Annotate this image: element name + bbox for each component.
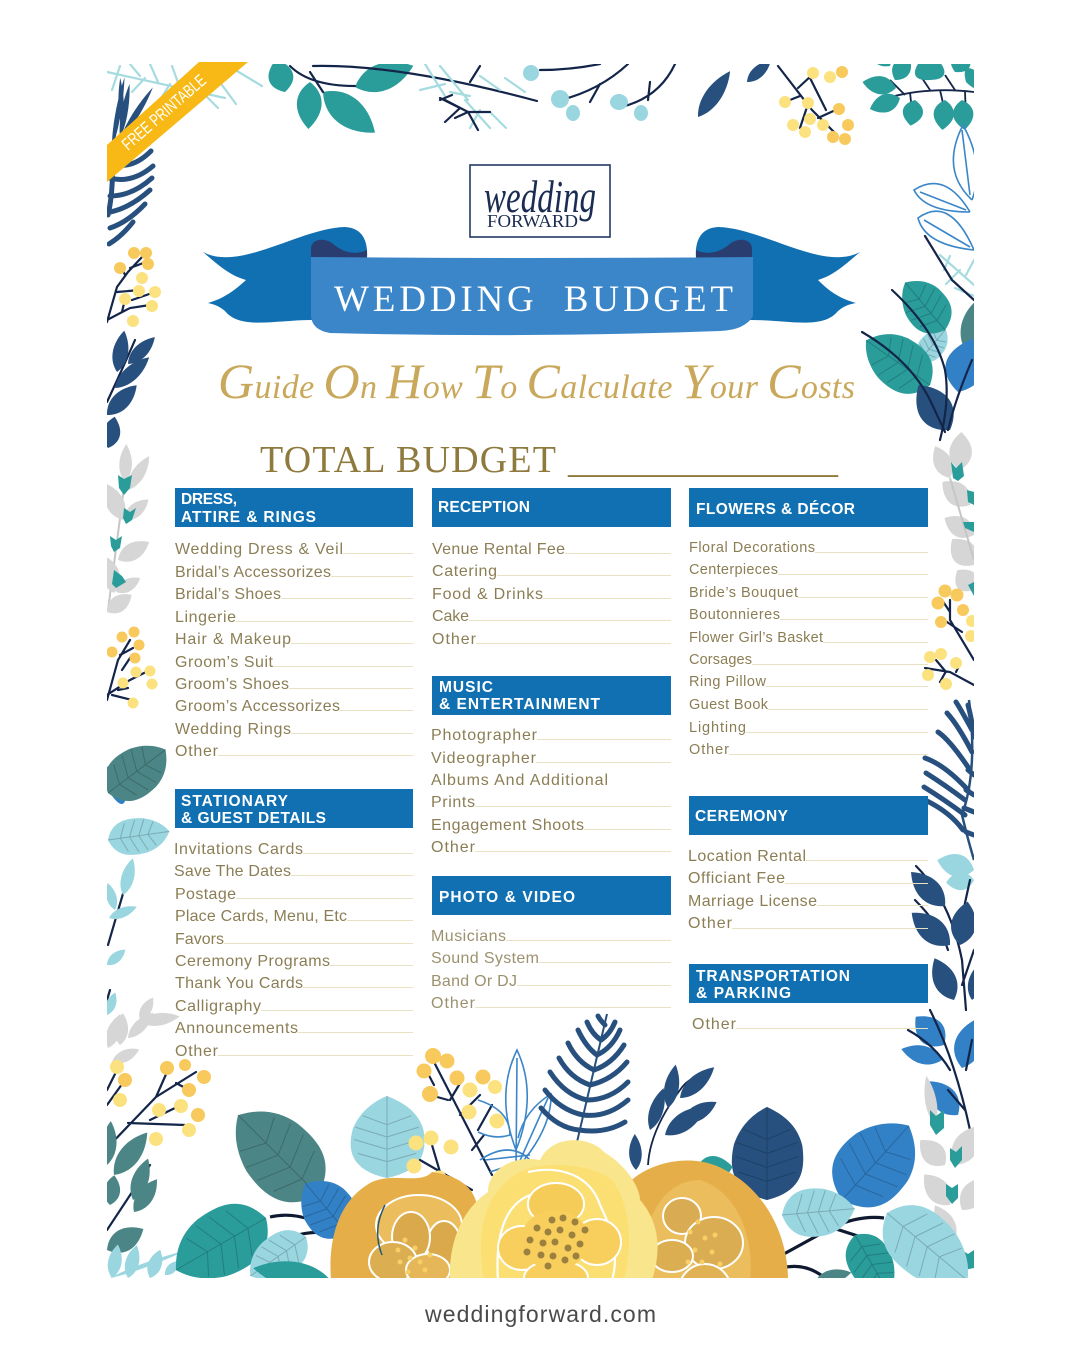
- panel: stationary and guest details: Ceremony Programs: [175, 953, 330, 970]
- panel: music and entertainment: Other: [431, 839, 476, 856]
- bottom left light leaves: [108, 1244, 178, 1278]
- light blue leaf: [351, 1096, 424, 1178]
- panel: ceremony: Other: [688, 915, 733, 932]
- panel: music and entertainment: Photographer: [431, 727, 538, 744]
- panel: ceremony: Location Rental: [688, 848, 806, 865]
- panel: stationary and guest details: STATIONARY: [181, 793, 289, 810]
- panel: transportation and parking: Other: [692, 1016, 737, 1033]
- panel: dress, attire and rings: Wedding Dress & Veil: [175, 541, 343, 558]
- panel: dress, attire and rings: [175, 488, 413, 760]
- bottom right grey sprig: [920, 1076, 974, 1270]
- light blue leaf far right: [866, 1189, 988, 1305]
- panel: transportation and parking: TRANSPORTATION: [696, 968, 850, 985]
- left yellow berries top: [107, 247, 161, 327]
- top left fern: [108, 77, 156, 244]
- panel: stationary and guest details: Other: [175, 1043, 219, 1060]
- panel: stationary and guest details: Favors: [175, 931, 224, 948]
- panel: reception: RECEPTION: [438, 499, 530, 516]
- panel: dress, attire and rings: DRESS,: [181, 491, 237, 508]
- subtitle: Guide On How To Calculate Your Costs: [218, 353, 855, 409]
- right teal and blue leaves: [860, 281, 974, 442]
- panel: music and entertainment: MUSIC: [439, 679, 493, 696]
- right yellow berries: [922, 584, 978, 690]
- centre fern: [541, 1014, 628, 1142]
- panel: stationary and guest details: Invitations Cards: [174, 841, 303, 858]
- panel: photo and video: Other: [431, 995, 476, 1012]
- left yellow berries lower: [106, 626, 158, 708]
- left orange flower: [330, 1172, 478, 1286]
- top teal leaves and branch: [268, 64, 538, 133]
- panel: reception: Other: [432, 631, 477, 648]
- panel: stationary and guest details: Postage: [175, 886, 236, 903]
- panel: dress, attire and rings: ATTIRE & RINGS: [181, 509, 316, 526]
- panel: ceremony: Officiant Fee: [688, 870, 785, 887]
- panel: reception: Food & Drinks: [432, 586, 543, 603]
- logo: [470, 165, 610, 237]
- teal leaf right: [815, 1224, 908, 1305]
- panel: flowers and decor: Centerpieces: [689, 562, 778, 578]
- light blue leaf right: [780, 1185, 857, 1239]
- title ribbon: [203, 227, 860, 335]
- left grey sprig with teal buds: [107, 444, 150, 614]
- top yellow berries: [778, 66, 854, 145]
- panel: dress, attire and rings: Wedding Rings: [175, 721, 291, 738]
- panel: photo and video: Musicians: [431, 928, 506, 945]
- panel: photo and video: PHOTO & VIDEO: [439, 889, 575, 906]
- wedding budget infographic page: [107, 62, 974, 1327]
- panel: music and entertainment: [431, 676, 671, 856]
- left light blue leaves: [107, 858, 137, 1015]
- right grey sprig with teal buds: [933, 432, 974, 596]
- blue leaf: [815, 1102, 936, 1225]
- panel: dress, attire and rings: Lingerie: [175, 609, 236, 626]
- panel: music and entertainment: Albums And Additional: [431, 772, 608, 789]
- panel: photo and video: Band Or DJ: [431, 973, 517, 990]
- panel: flowers and decor: FLOWERS & DÉCOR: [696, 501, 855, 518]
- panel: stationary and guest details: Save The Dates: [174, 863, 291, 880]
- panel: dress, attire and rings: Hair & Makeup: [175, 631, 291, 648]
- footer website: weddingforward.com: [424, 1301, 656, 1327]
- bottom light blue leaf left: [250, 1230, 328, 1278]
- panel: dress, attire and rings: Groom’s Suit: [175, 654, 274, 671]
- top blue berries branch: [523, 64, 675, 121]
- top navy leaves: [698, 64, 770, 117]
- panel: dress, attire and rings: Groom’s Accessorizes: [175, 698, 340, 715]
- panel: dress, attire and rings: Bridal’s Accessorizes: [175, 564, 331, 581]
- centre outline leaves: [478, 1050, 551, 1172]
- left grey sprig lower: [107, 998, 180, 1063]
- right outline leaves: [914, 125, 977, 250]
- panel: flowers and decor: Ring Pillow: [689, 674, 767, 690]
- panel: flowers and decor: Boutonnieres: [689, 607, 780, 623]
- panel: flowers and decor: Corsages: [689, 652, 752, 668]
- right sprig: [925, 236, 974, 300]
- panel: ceremony: [688, 796, 928, 932]
- panel: dress, attire and rings: Bridal’s Shoes: [175, 586, 281, 603]
- panel: stationary and guest details: Thank You Cards: [175, 975, 303, 992]
- free printable corner ribbon: [107, 62, 248, 182]
- total budget heading: ______________: [567, 439, 839, 481]
- panel: reception: Cake: [432, 608, 469, 625]
- panel: flowers and decor: Bride’s Bouquet: [689, 585, 798, 601]
- left teal leaf: [107, 746, 170, 855]
- panel: music and entertainment: & ENTERTAINMENT: [439, 696, 601, 713]
- blue leaf behind flower: [301, 1181, 352, 1239]
- logo: wedding: [484, 171, 596, 222]
- panel: music and entertainment: Videographer: [431, 750, 537, 767]
- panel: stationary and guest details: Calligraphy: [175, 998, 261, 1015]
- centre yellow flower: [450, 1140, 658, 1296]
- panel: photo and video: [431, 876, 671, 1012]
- total budget heading: TOTAL BUDGET: [260, 439, 556, 481]
- bottom branches: [270, 1214, 884, 1276]
- title ribbon: WEDDING BUDGET: [334, 279, 733, 320]
- teal leaf behind right flower: [693, 1153, 735, 1185]
- left yellow branch: [107, 1059, 211, 1148]
- panel: reception: [432, 488, 671, 648]
- panel: stationary and guest details: Announcements: [175, 1020, 298, 1037]
- panel: flowers and decor: Floral Decorations: [689, 540, 815, 556]
- panel: stationary and guest details: & GUEST DETAILS: [181, 810, 326, 827]
- top left light sprig: [107, 64, 262, 108]
- panel: flowers and decor: Guest Book: [689, 697, 769, 713]
- panel: dress, attire and rings: Other: [175, 743, 219, 760]
- right blue leaves: [902, 1008, 974, 1129]
- navy leaf: [732, 1107, 803, 1200]
- top right teal sprig: [862, 64, 974, 130]
- panel: transportation and parking: [689, 964, 928, 1033]
- dark teal leaf: [236, 1112, 326, 1202]
- logo: FORWARD: [487, 211, 578, 231]
- right orange flower: [622, 1160, 788, 1316]
- top light sprig with dark twigs: [420, 64, 525, 130]
- panel: flowers and decor: [689, 488, 928, 758]
- panel: stationary and guest details: Place Cards, Menu, Etc: [175, 908, 347, 925]
- panel: music and entertainment: Prints: [431, 794, 475, 811]
- floral border artwork: [94, 32, 997, 1316]
- panel: ceremony: Marriage License: [688, 893, 817, 910]
- bottom teal leaf left: [176, 1204, 268, 1278]
- panel: flowers and decor: Other: [689, 742, 729, 758]
- panel: ceremony: CEREMONY: [695, 808, 789, 825]
- right navy leaves: [911, 864, 974, 1012]
- left navy leaves: [107, 330, 155, 448]
- panel: music and entertainment: Engagement Shoots: [431, 817, 584, 834]
- panel: flowers and decor: Lighting: [689, 720, 746, 736]
- panel: reception: Catering: [432, 563, 497, 580]
- panel: transportation and parking: & PARKING: [696, 985, 791, 1002]
- navy sprig: [628, 1062, 720, 1170]
- free printable corner ribbon: FREE PRINTABLE: [118, 71, 210, 154]
- panel: photo and video: Sound System: [431, 950, 539, 967]
- centre yellow berry branch: [406, 1048, 504, 1190]
- panel: dress, attire and rings: Groom’s Shoes: [175, 676, 289, 693]
- panel: stationary and guest details: [174, 789, 413, 1060]
- right fern: [924, 700, 974, 860]
- panel: flowers and decor: Flower Girl’s Basket: [689, 630, 823, 646]
- total budget heading: [260, 439, 839, 481]
- panel: reception: Venue Rental Fee: [432, 541, 565, 558]
- left dark teal leaves: [107, 1121, 157, 1253]
- right light blue leaves: [937, 854, 974, 890]
